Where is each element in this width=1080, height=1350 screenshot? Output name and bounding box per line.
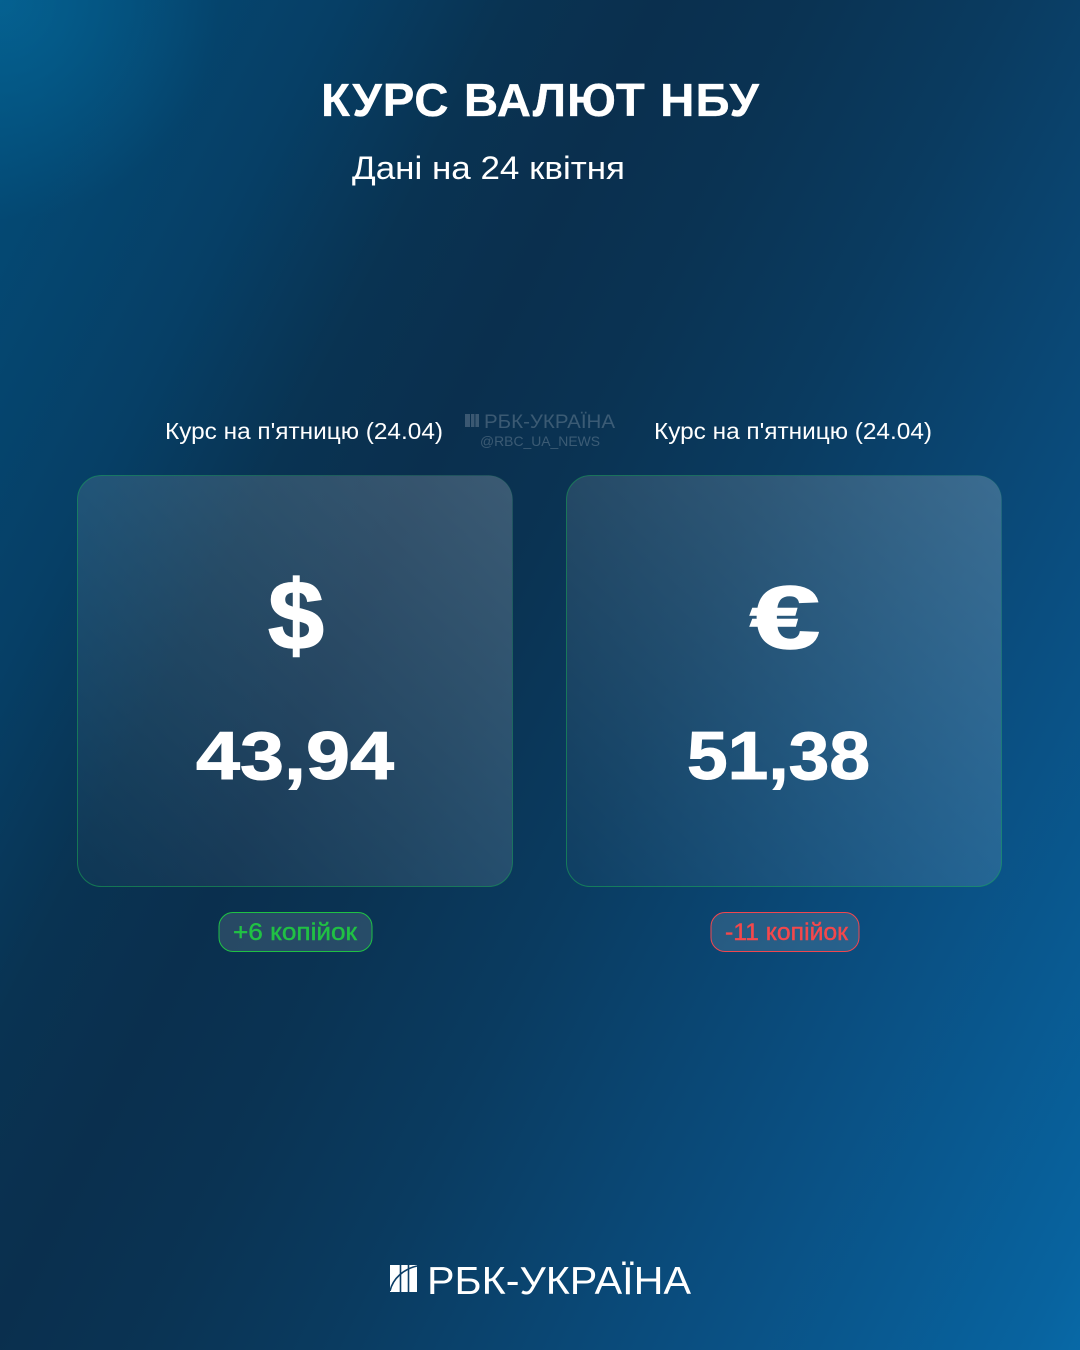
- icon: RBC logo mark: [390, 1265, 417, 1292]
- USD card background: [78, 476, 512, 886]
- label: USD rate date: Курс на п'ятницю (24.04): [165, 418, 443, 444]
- EUR change text: -11 копійок: [725, 919, 849, 946]
- footer brand name: РБК-УКРАЇНА: [427, 1260, 691, 1303]
- label: EUR rate date: Курс на п'ятницю (24.04): [654, 418, 932, 444]
- watermark handle: @RBC_UA_NEWS: [480, 433, 600, 449]
- panel: USD card: [78, 476, 512, 886]
- panel: EUR card: [566, 476, 1002, 886]
- title: КУРС ВАЛЮТ НБУ: [321, 74, 760, 126]
- badge: USD change: [219, 912, 372, 952]
- subtitle: date: Дані на 24 квітня: [352, 150, 625, 186]
- EUR card background: [566, 476, 1002, 886]
- USD change text: +6 копійок: [233, 919, 358, 946]
- badge: EUR change: [711, 912, 859, 952]
- icon: dollar sign: $: [268, 560, 324, 670]
- watermark logo icon: [465, 414, 479, 427]
- icon: euro sign: €: [750, 567, 820, 667]
- USD rate value: 43,94: [196, 718, 394, 794]
- footer logo: [390, 1260, 691, 1303]
- EUR rate value: 51,38: [687, 718, 870, 794]
- watermark name: РБК-УКРАЇНА: [484, 412, 615, 433]
- watermark: RBC-Ukraine: [465, 412, 615, 449]
